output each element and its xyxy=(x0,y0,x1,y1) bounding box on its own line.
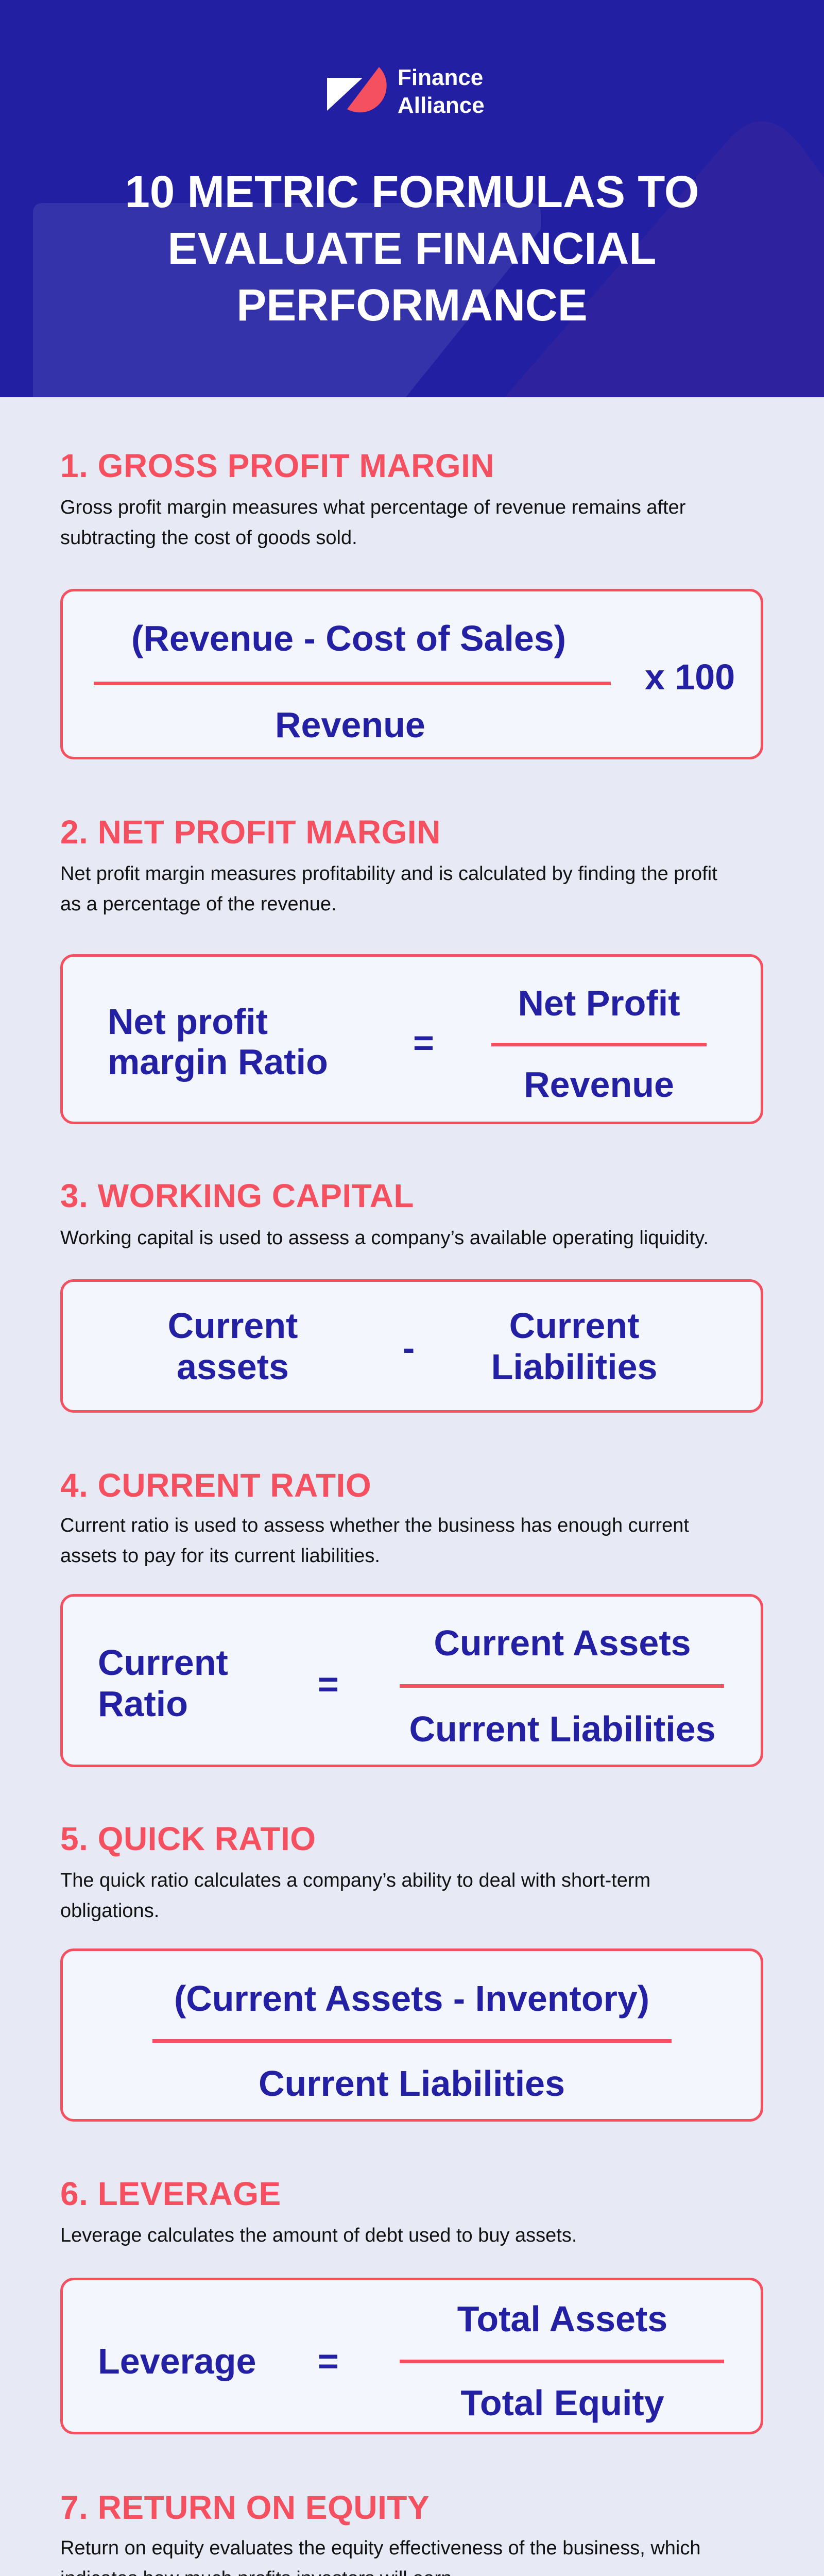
section 5 description xyxy=(60,1870,650,1922)
panel: quick ratio formula xyxy=(60,1948,763,2122)
panel: working capital formula: Current xyxy=(168,1306,298,1346)
panel: leverage formula xyxy=(60,2278,763,2434)
panel: leverage formula: Leverage xyxy=(98,2341,256,2381)
panel: net profit margin formula: Net Profit xyxy=(518,983,680,1023)
title xyxy=(125,167,699,330)
panel: net profit margin formula: Net profit xyxy=(108,1002,268,1042)
section 2 description xyxy=(60,863,717,915)
section 3 heading: 3. WORKING CAPITAL xyxy=(60,1177,414,1214)
section 7 description xyxy=(60,2537,700,2576)
section 2 description: Net profit margin measures profitability and is calculated by finding the profit xyxy=(60,863,717,885)
panel: gross profit margin formula: Revenue xyxy=(275,705,425,745)
panel: leverage formula: Total Assets xyxy=(457,2299,667,2339)
panel: quick ratio formula: (Current Assets - Inventory) xyxy=(174,1978,649,2019)
logo: header: Finance xyxy=(398,65,483,90)
section 7 heading: 7. RETURN ON EQUITY xyxy=(60,2489,430,2526)
panel: quick ratio formula: Current Liabilities xyxy=(259,2063,565,2104)
panel: working capital formula xyxy=(60,1279,763,1413)
panel: leverage formula: Total Equity xyxy=(460,2383,664,2423)
panel: working capital formula: assets xyxy=(177,1347,289,1387)
section 5 heading: 5. QUICK RATIO xyxy=(60,1820,316,1857)
section 1 heading: 1. GROSS PROFIT MARGIN xyxy=(60,447,494,484)
section 1 description xyxy=(60,497,685,549)
section 1 description: subtracting the cost of goods sold. xyxy=(60,527,357,549)
logo: header: Alliance xyxy=(398,93,485,118)
panel: current ratio formula: Ratio xyxy=(98,1684,188,1724)
title: 10 METRIC FORMULAS TO xyxy=(125,167,699,217)
section 6 description: Leverage calculates the amount of debt used to buy assets. xyxy=(60,2225,577,2246)
panel: working capital formula: Liabilities xyxy=(491,1347,657,1387)
panel: current ratio formula: = xyxy=(318,1664,339,1704)
panel: working capital formula: Current xyxy=(509,1306,639,1346)
panel: working capital formula: - xyxy=(403,1328,415,1368)
section 6 heading: 6. LEVERAGE xyxy=(60,2175,281,2212)
icon: red half circle xyxy=(347,67,387,112)
section 4 description: assets to pay for its current liabilities. xyxy=(60,1545,380,1567)
panel: net profit margin formula xyxy=(60,954,763,1124)
title: EVALUATE FINANCIAL xyxy=(168,224,656,274)
panel: leverage formula: = xyxy=(318,2341,339,2381)
panel: current ratio formula: Current Assets xyxy=(434,1623,691,1663)
section 4 heading: 4. CURRENT RATIO xyxy=(60,1467,371,1504)
logo: header xyxy=(327,65,485,118)
panel: gross profit margin formula: (Revenue - Cost of Sales) xyxy=(131,618,566,658)
panel: net profit margin formula: = xyxy=(413,1023,434,1063)
panel: current ratio formula: Current xyxy=(98,1642,228,1683)
panel: net profit margin formula: margin Ratio xyxy=(108,1042,328,1082)
section 5 description: obligations. xyxy=(60,1900,159,1922)
panel: gross profit margin formula: x 100 xyxy=(645,657,735,697)
section 1 description: Gross profit margin measures what percentage of revenue remains after xyxy=(60,497,685,518)
panel: current ratio formula: Current Liabilities xyxy=(409,1709,716,1749)
section 2 heading: 2. NET PROFIT MARGIN xyxy=(60,814,441,851)
panel: net profit margin formula: Revenue xyxy=(524,1064,674,1105)
section 7 description: Return on equity evaluates the equity effectiveness of the business, which xyxy=(60,2537,700,2559)
section 4 description xyxy=(60,1515,689,1567)
icon: white triangle xyxy=(327,78,363,111)
header banner xyxy=(0,0,824,397)
section 3 description: Working capital is used to assess a company’s available operating liquidity. xyxy=(60,1227,709,1249)
title: PERFORMANCE xyxy=(236,280,588,330)
panel: current ratio formula xyxy=(60,1594,763,1767)
panel: gross profit margin formula xyxy=(60,589,763,759)
section 4 description: Current ratio is used to assess whether the business has enough current xyxy=(60,1515,689,1536)
section 2 description: as a percentage of the revenue. xyxy=(60,893,337,915)
section 5 description: The quick ratio calculates a company’s ability to deal with short-term xyxy=(60,1870,650,1891)
